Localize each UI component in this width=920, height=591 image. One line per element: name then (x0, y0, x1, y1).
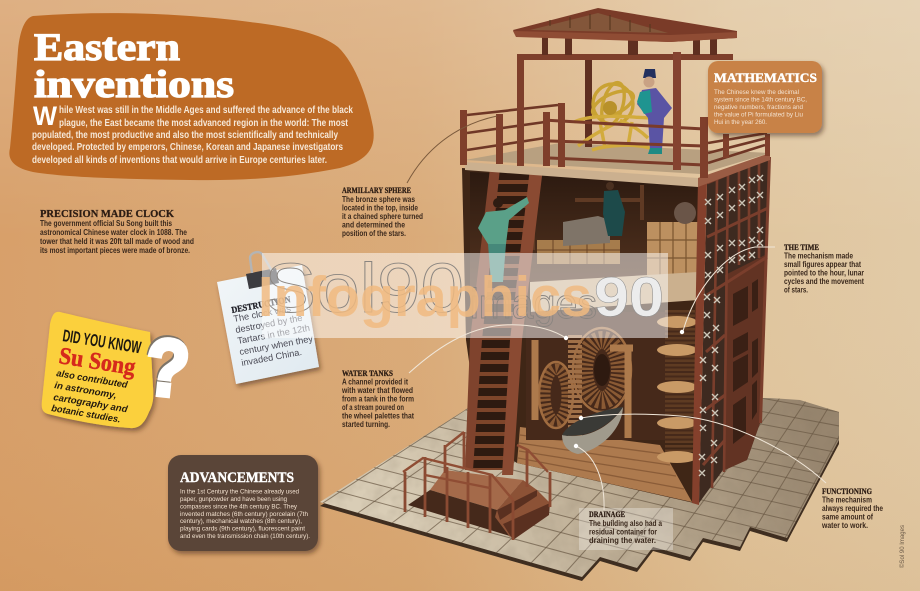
advancements text: paper, gunpowder and have been using (180, 496, 287, 503)
text block: precision made clock (40, 208, 194, 255)
advancements text: playing cards (9th century), fluorescent paint (180, 526, 305, 532)
mathematics text: system since the 14th century BC, (714, 96, 807, 104)
light floor (530, 272, 698, 312)
teal man (603, 182, 625, 236)
room posts (533, 182, 642, 250)
bowl (562, 407, 623, 454)
title: inventions (34, 63, 234, 106)
text block: drainage: residual container for (589, 528, 657, 536)
panel: did you know (42, 312, 193, 428)
text block: the time: of stars. (784, 286, 808, 294)
text block: the time: cycles and the movement (784, 277, 864, 286)
mathematics text: The Chinese knew the decimal (714, 89, 799, 96)
intro text block: populated, the most productive and also the most scientifically and technically (32, 130, 338, 141)
text block: armillary sphere: it a chained sphere turned (342, 212, 423, 221)
icon: question mark: ? (140, 319, 192, 412)
wood floor (517, 427, 692, 502)
did you know heading: DID YOU KNOW (61, 326, 143, 357)
did you know text: also contributed (56, 367, 129, 390)
panel: intro title blob (9, 13, 374, 180)
tiered clock drum (657, 310, 697, 463)
grey machine (563, 216, 610, 246)
text block: precision made clock: astronomical Chinese water clock in 1088. The (40, 228, 188, 237)
credit: ©Sol 90 Images (899, 525, 906, 568)
leader lines (407, 116, 826, 510)
intro text block (32, 101, 353, 166)
advancements text: century), mechanical watches (8th century), (180, 518, 302, 525)
destruction text: century when they (239, 333, 314, 357)
top deck (465, 143, 770, 187)
armillary sphere (574, 80, 652, 150)
text block: water tanks: from a tank in the form (342, 394, 414, 404)
did you know text: cartography and (53, 391, 129, 414)
text block: drainage: The building also had a (589, 519, 663, 528)
did you know text: botanic studies. (51, 402, 122, 425)
mathematics text: the value of Pi formulated by Liu (714, 112, 803, 118)
intro text block: hile West was still in the Middle Ages and suffered the advance of the black (59, 105, 353, 116)
text block: functioning: FUNCTIONING (822, 487, 872, 496)
watermark: Sol90 (264, 249, 464, 327)
text block: water tanks: of a stream poured on (342, 403, 404, 412)
text block: armillary sphere: position of the stars. (342, 229, 406, 238)
text block: the time: The mechanism made (784, 252, 854, 260)
upper room wall (470, 172, 698, 290)
text block: water tanks: started turning. (342, 420, 390, 429)
deck rails front and posts (460, 103, 770, 178)
advancements text: In the 1st Century the Chinese already used (180, 488, 299, 496)
text block: precision made clock: PRECISION MADE CLOCK (40, 208, 174, 220)
illustration: tile base (320, 398, 839, 581)
panel: advancements (168, 455, 318, 551)
advancements text: invented matches (6th century) porcelain (7th (180, 511, 308, 518)
deck rails back (467, 105, 767, 163)
mathematics text (714, 89, 807, 126)
su song: Su Song (57, 343, 137, 381)
text block: the time: THE TIME (784, 243, 819, 252)
destruction text: The clock was (233, 303, 292, 324)
green man on stairs (478, 197, 529, 282)
intro text block: developed all kinds of inventions that would arrive in Europe centuries later. (32, 155, 327, 166)
text block: functioning: The mechanism (822, 496, 872, 504)
panel: mathematics (708, 61, 822, 133)
text block: the time (784, 243, 864, 294)
icon: binder clip (246, 252, 279, 289)
text block: water tanks: WATER TANKS (342, 369, 393, 378)
text block: armillary sphere (342, 186, 423, 238)
advancements text: and even the transmission chain (10th century). (180, 533, 310, 540)
panel: destruction note (217, 252, 319, 384)
watermark: images (470, 280, 597, 327)
text block: functioning: same amount of (822, 512, 873, 522)
right lattice wall (692, 157, 771, 505)
title: Eastern (34, 26, 180, 69)
text block: drainage: draining the water. (589, 536, 656, 545)
intro text block: W (33, 101, 57, 131)
astronomer (637, 69, 672, 154)
text block: precision made clock: tower that held it was 20ft tall made of wood and (40, 237, 194, 246)
watermark: Infographics (258, 265, 592, 329)
text block: the time: pointed to the hour, lunar (784, 268, 864, 278)
roof (513, 8, 737, 42)
text block: functioning (821, 487, 884, 530)
text block: water tanks (341, 369, 414, 429)
destruction text (231, 294, 314, 368)
watermark (258, 249, 668, 338)
destruction text: DESTRUCTION (231, 294, 292, 315)
text block: drainage (579, 508, 673, 550)
intro text block: plague, the East became the most advanced region in the world: The most (59, 118, 349, 129)
text block: water tanks: A channel provided it (342, 378, 408, 386)
advancements heading: ADVANCEMENTS (180, 470, 294, 486)
text block: armillary sphere: and determined the (342, 220, 406, 230)
mathematics text: Hui in the year 260. (714, 119, 767, 126)
text block: the time: small figures appear that (784, 260, 861, 269)
watermark: 90 (594, 265, 664, 328)
text block: precision made clock: The government official Su Song built this (40, 219, 173, 228)
roof structure (513, 8, 737, 170)
text block: armillary sphere: located in the top, inside (342, 204, 419, 212)
wheels and gears (526, 312, 696, 445)
white lattice crosses (699, 175, 763, 476)
text block: armillary sphere: The bronze sphere was (342, 195, 416, 204)
mathematics heading: MATHEMATICS (714, 70, 817, 85)
text block: precision made clock: its most important pieces were made of bronze. (40, 246, 190, 255)
did you know text: in astronomy, (54, 379, 118, 400)
text block: functioning: water to work. (821, 521, 868, 530)
staircase (465, 168, 543, 475)
text block: water tanks: the wheel palettes that (342, 412, 414, 420)
advancements text (180, 488, 310, 540)
text block: armillary sphere: ARMILLARY SPHERE (342, 186, 411, 195)
text block: functioning: always required the (822, 504, 884, 513)
mathematics text: negative numbers, fractions and (714, 104, 803, 111)
crate left (537, 240, 620, 264)
crate right (647, 202, 698, 278)
did you know text (51, 367, 129, 425)
illustration: tower (403, 8, 771, 540)
icon: question mark: ? (141, 321, 193, 414)
text block: water tanks: with water that flowed (341, 386, 413, 395)
destruction text: destroyed by the (235, 313, 303, 335)
tower interior (462, 168, 698, 503)
title (34, 26, 234, 106)
destruction text: Tartars in the 12th (237, 323, 311, 346)
destruction text: invaded China. (241, 347, 303, 368)
intro text block: developed. Protected by emperors, Chinese, Korean and Japanese investigators (32, 142, 343, 153)
text block: drainage: DRAINAGE (589, 510, 625, 519)
stair landing (403, 432, 550, 540)
leader dots (564, 330, 684, 448)
advancements text: compasses since the 4th century BC. They (180, 504, 298, 510)
